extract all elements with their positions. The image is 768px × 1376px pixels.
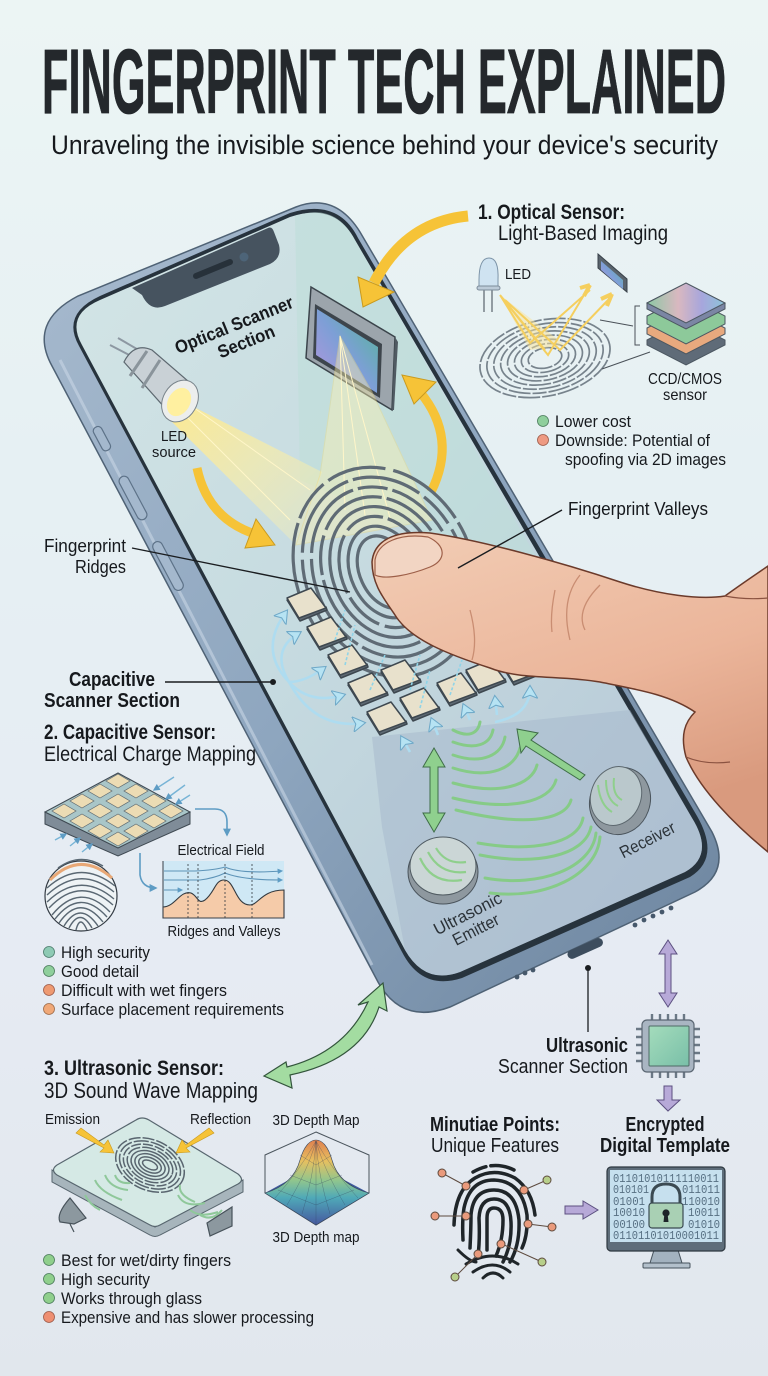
purple arrow right: [565, 1201, 598, 1219]
yellow arrows: [76, 1128, 214, 1153]
pros and cons: High security: [61, 943, 150, 962]
wave arcs: [85, 1175, 222, 1218]
optical sensor module: [306, 287, 398, 410]
callout: ultrasonic scanner section: Ultrasonic: [546, 1035, 628, 1057]
callout: fingerprint ridges: Ridges: [75, 557, 126, 577]
LED light beam: [168, 398, 322, 545]
binary code: 010101: [613, 1183, 649, 1197]
callout: capacitive scanner section: Capacitive: [69, 669, 155, 691]
electrical field chart: Ridges and Valleys: [168, 924, 280, 940]
pros and cons: [44, 943, 284, 1019]
binary code: 01010: [688, 1218, 720, 1232]
capacitive sensor tiles: [287, 588, 541, 735]
screen: [76, 213, 702, 976]
label: ultrasonic emitter: Emitter: [449, 910, 503, 950]
label: LED source: source: [152, 444, 196, 461]
pros and cons: Good detail: [61, 962, 139, 981]
binary code: 01101101010001011: [613, 1229, 719, 1243]
green double arrow: emitter to fingerprint: [423, 748, 445, 832]
heading: 1. Optical Sensor:: [478, 201, 625, 224]
green arrow: to receiver: [517, 729, 585, 780]
binary code: [613, 1172, 720, 1243]
pros and cons: [44, 1251, 314, 1327]
pros and cons: High security: [61, 1270, 150, 1289]
mini sensor: [598, 254, 627, 292]
hand and finger: [372, 532, 768, 852]
heading: Minutiae Points:: [430, 1114, 560, 1136]
electrical field chart: Electrical Field: [178, 843, 264, 859]
CCD/CMOS sensor stack: [647, 283, 725, 365]
panel: ultrasonic sensor: [44, 1057, 369, 1327]
purple arrow down: [657, 1086, 680, 1111]
heading: [600, 1114, 730, 1157]
fingerprint icon: [454, 1165, 535, 1278]
binary code: 110010: [682, 1195, 720, 1209]
ultrasonic wave arcs: [453, 722, 600, 894]
sensor label: CCD/CMOS: [648, 371, 722, 388]
LED source: [110, 338, 206, 429]
pros and cons: spoofing via 2D images: [565, 450, 726, 469]
mini LED: LED: [505, 266, 531, 283]
mini light paths: [500, 295, 565, 350]
panel: capacitive sensor: [44, 721, 284, 1019]
panel: minutiae points: [430, 1114, 560, 1281]
purple double arrow: [659, 940, 677, 1007]
panel: encrypted template: [600, 1114, 730, 1268]
callout: ultrasonic scanner section: Scanner Section: [498, 1056, 628, 1078]
heading: Digital Template: [600, 1135, 730, 1157]
binary code: 10010: [613, 1206, 645, 1220]
front camera: [240, 252, 248, 262]
callout: fingerprint valleys: [458, 499, 708, 568]
plate fingerprint: [107, 1127, 193, 1203]
capacitive field arrows: [273, 612, 530, 752]
pros and cons: [538, 412, 726, 469]
heading: [430, 1114, 560, 1157]
binary code: 011011: [682, 1183, 720, 1197]
callout: ultrasonic scanner section: [498, 965, 628, 1078]
yellow arrow: to sensor: [358, 216, 468, 307]
binary code: 01001: [613, 1195, 645, 1209]
subtitle: Unraveling the invisible science behind your device's security: [51, 130, 718, 160]
pros and cons: Difficult with wet fingers: [61, 981, 227, 1000]
heading: [478, 201, 668, 245]
processor chip: [636, 1014, 700, 1078]
sensor label: [648, 371, 722, 404]
label: ultrasonic emitter: [430, 888, 514, 955]
sensor surface: [316, 309, 378, 393]
binary code: 10011: [688, 1206, 720, 1220]
ultrasonic receiver: [580, 759, 660, 843]
padlock: [649, 1184, 683, 1228]
mini fingerprint: [473, 307, 617, 409]
pros and cons: Surface placement requirements: [61, 1000, 284, 1019]
callout: fingerprint ridges: Fingerprint: [44, 536, 126, 556]
binary code: 00100: [613, 1218, 645, 1232]
flow arrows: [140, 809, 227, 888]
pros and cons: Lower cost: [555, 412, 631, 431]
bottom ports: [515, 906, 673, 979]
heading: Encrypted: [626, 1114, 704, 1136]
3D depth map: 3D Depth Map: [272, 1113, 360, 1129]
charge sparks through tiles: [335, 610, 500, 708]
side buttons: [92, 425, 185, 592]
heading: Electrical Charge Mapping: [44, 743, 256, 766]
ultrasonic emitter: [408, 837, 478, 904]
minutiae markers: [431, 1169, 556, 1281]
3D depth map: [265, 1113, 369, 1246]
labels: Reflection: [190, 1112, 251, 1128]
bezel: [73, 209, 707, 981]
notch: [132, 228, 280, 308]
phone illustration: [44, 203, 719, 1012]
fingerprint on screen: [260, 437, 510, 707]
glass plate: [52, 1118, 243, 1236]
heading: [44, 721, 256, 766]
heading: 3. Ultrasonic Sensor:: [44, 1057, 224, 1080]
label: optical scanner section: Optical Scanner: [172, 292, 296, 358]
label: LED source: [152, 428, 196, 461]
heading: [44, 1057, 258, 1103]
magnified fingerprint: [45, 859, 117, 931]
heading: Light-Based Imaging: [498, 222, 668, 245]
panel: optical sensor: [473, 201, 726, 469]
earpiece speaker: [196, 262, 230, 276]
pros and cons: Works through glass: [61, 1289, 202, 1308]
pros and cons: Best for wet/dirty fingers: [61, 1251, 231, 1270]
label: receiver: Receiver: [616, 818, 679, 862]
callout: fingerprint ridges: [44, 536, 350, 592]
heading: 2. Capacitive Sensor:: [44, 721, 216, 744]
callout: capacitive scanner section: Scanner Section: [44, 690, 180, 712]
sensor label: sensor: [663, 387, 708, 404]
electrical field chart: [163, 843, 284, 940]
binary code: 01101010111110011: [613, 1172, 719, 1186]
label: ultrasonic emitter: Ultrasonic: [430, 888, 505, 939]
yellow arrow: light to finger: [197, 468, 275, 548]
heading: Unique Features: [431, 1135, 559, 1157]
receiver block: [207, 1207, 232, 1236]
3D depth map: 3D Depth map: [272, 1230, 360, 1246]
phone body: [44, 203, 719, 1012]
labels: [45, 1112, 251, 1128]
green double arrow: phone to ultrasonic panel: [264, 983, 387, 1088]
monitor: [607, 1167, 725, 1268]
emitter speaker: [59, 1198, 86, 1232]
heading: 3D Sound Wave Mapping: [44, 1078, 258, 1103]
sensor light fan: [296, 336, 432, 545]
callout: capacitive scanner section: [44, 669, 276, 712]
label: LED source: LED: [161, 428, 187, 445]
labels: Emission: [45, 1112, 100, 1128]
mini LED: [477, 258, 531, 312]
callout: fingerprint valleys: Fingerprint Valleys: [568, 499, 708, 519]
yellow arrow: reflection upward: [402, 375, 442, 492]
fingernail: [375, 536, 442, 577]
pros and cons: Expensive and has slower processing: [61, 1308, 314, 1327]
LED lens: [162, 384, 196, 420]
pros and cons: Downside: Potential of: [555, 431, 710, 450]
label: optical scanner section: Section: [215, 321, 278, 362]
sensor grid board: [45, 773, 190, 856]
